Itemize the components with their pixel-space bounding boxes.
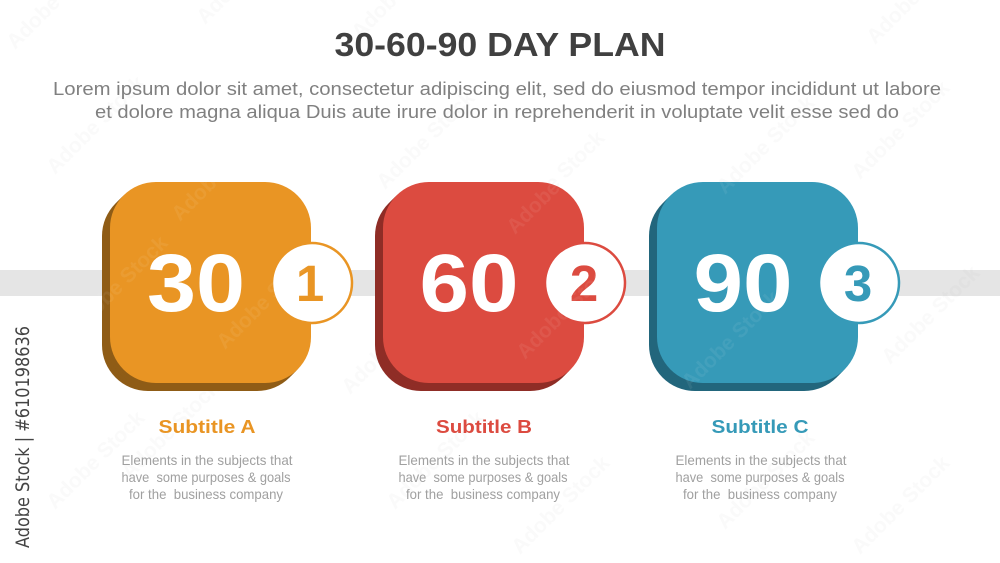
card 3 bbox=[657, 182, 858, 383]
description C: for the business company bbox=[683, 486, 837, 502]
watermark on cards: Adobe Stock bbox=[677, 286, 785, 394]
number 90: 90 bbox=[694, 238, 792, 329]
description A bbox=[122, 452, 293, 502]
badge 1: 1 bbox=[296, 255, 324, 312]
description C bbox=[676, 452, 847, 502]
card extrusion 2 bbox=[375, 184, 582, 391]
description A: for the business company bbox=[129, 486, 283, 502]
subtitle A: Subtitle A bbox=[158, 417, 256, 437]
description C: have some purposes & goals bbox=[676, 469, 844, 485]
intro paragraph: Lorem ipsum dolor sit amet, consectetur adipiscing elit, sed do eiusmod tempor incididunt ut labore bbox=[53, 79, 941, 99]
badge 3: 3 bbox=[844, 255, 872, 312]
step 2: 60 days bbox=[375, 182, 625, 391]
badge 2: 2 bbox=[570, 255, 598, 312]
badge 1 bbox=[272, 243, 352, 323]
watermark on background: Adobe Stock bbox=[372, 86, 480, 194]
title: 30-60-90 DAY PLAN bbox=[334, 26, 666, 63]
watermark on cards: Adobe Stock bbox=[512, 256, 620, 364]
watermark on background: Adobe Stock bbox=[42, 406, 150, 514]
subtitle C: Subtitle C bbox=[712, 417, 808, 437]
watermark on background: Adobe Stock bbox=[507, 451, 615, 559]
stock id label: Adobe Stock | #610198636 bbox=[12, 326, 34, 548]
description B bbox=[398, 452, 570, 502]
watermark on background: Adobe Stock bbox=[502, 126, 610, 234]
watermark on background: Adobe Stock bbox=[877, 261, 985, 369]
description B: Elements in the subjects that bbox=[398, 452, 570, 468]
watermark on cards: Adobe Stock bbox=[502, 131, 610, 239]
subtitle B: Subtitle B bbox=[436, 417, 532, 437]
timeline band bbox=[0, 270, 1000, 296]
card 2 bbox=[383, 182, 584, 383]
description A: Elements in the subjects that bbox=[122, 452, 293, 468]
step 1: 30 days bbox=[102, 182, 352, 391]
number 30: 30 bbox=[147, 238, 245, 329]
watermark on cards: Adobe Stock bbox=[65, 231, 173, 339]
watermark on background: Adobe Stock bbox=[42, 71, 150, 179]
watermark on background: Adobe Stock bbox=[382, 406, 490, 514]
watermark on background: Adobe Stock bbox=[712, 91, 820, 199]
badge 2 bbox=[545, 243, 625, 323]
watermark on background: Adobe Stock bbox=[337, 291, 445, 399]
card extrusion 1 bbox=[102, 184, 309, 391]
watermark on background: Adobe Stock bbox=[712, 426, 820, 534]
watermark on cards: Adobe Stock bbox=[212, 246, 320, 354]
watermark on cards bbox=[65, 91, 820, 394]
watermark on background: Adobe Stock bbox=[847, 451, 955, 559]
watermark on background: Adobe Stock bbox=[117, 376, 225, 484]
badge 3 bbox=[819, 243, 899, 323]
watermark on cards: Adobe Stock bbox=[167, 118, 275, 226]
intro paragraph bbox=[53, 79, 941, 122]
intro paragraph: et dolore magna aliqua Duis aute irure dolor in reprehenderit in voluptate velit esse sed do bbox=[95, 102, 899, 122]
watermark on cards: Adobe Stock bbox=[712, 91, 820, 199]
description B: for the business company bbox=[406, 486, 560, 502]
step 3: 90 days bbox=[649, 182, 899, 391]
card extrusion 3 bbox=[649, 184, 856, 391]
description B: have some purposes & goals bbox=[398, 469, 568, 485]
number 60: 60 bbox=[420, 238, 518, 329]
description C: Elements in the subjects that bbox=[676, 452, 847, 468]
card 1 bbox=[110, 182, 311, 383]
watermark on background: Adobe Stock bbox=[847, 76, 955, 184]
description A: have some purposes & goals bbox=[122, 469, 290, 485]
